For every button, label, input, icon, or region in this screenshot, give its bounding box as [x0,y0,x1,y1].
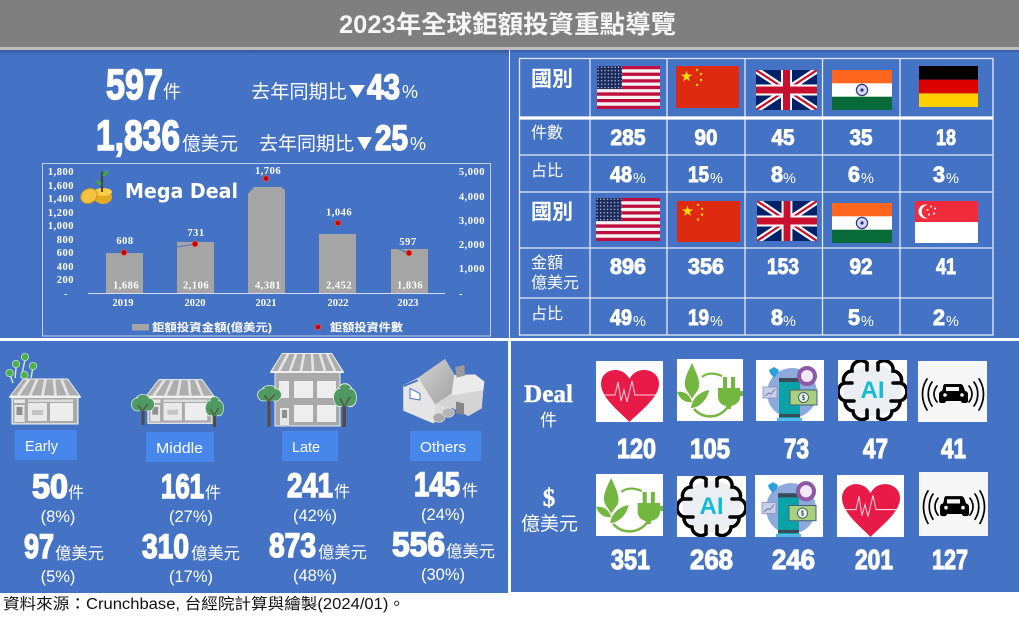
row: amount [531,254,956,292]
middle stage figures: 件 [205,484,221,502]
row label: amount: $ [543,485,555,512]
middle stage figures: (27%) [169,508,213,526]
row: deal share: % [710,171,723,187]
row: amount share: 19 [688,305,709,330]
bar value labels: 2,106 [183,280,209,292]
right axis labels: 5,000 [459,167,485,178]
row: amount: 金額 [531,254,563,272]
stage label: Others: Others [420,439,466,456]
bars: investment amount [106,187,428,293]
row: deal count: 285 [610,125,646,150]
count labels [116,166,417,248]
count labels: 1,046 [326,208,352,218]
row: amount: 153 [767,254,799,279]
row: deal share: 6 [848,162,860,187]
right axis labels: 4,000 [459,192,485,203]
investment amount year-over-year change [259,119,426,158]
right axis labels: 1,000 [459,264,485,275]
year labels: 2020 [184,298,206,309]
row: amount share: 占比 [531,305,563,323]
bar value labels: 4,381 [255,280,281,292]
late stage figures [269,467,367,585]
count labels: 731 [187,228,205,239]
late stage figures: (48%) [293,567,337,585]
chart legend: 鉅額投資金額(億美元) [152,320,272,334]
chart: mega deal amount and count 2019-2023 [42,164,490,336]
row: deal count: 45 [772,125,794,150]
row label: amount: 億美元 [521,513,578,535]
sector icons by deal count: AI [860,377,884,404]
sector icons by deal count [596,359,987,422]
row: amount share [531,305,959,330]
sector deal counts [617,433,966,464]
investment amount year-over-year change: 25 [375,119,408,158]
stage label: Early: Early [25,438,58,455]
left axis labels: - [64,289,68,300]
sector deal counts: 120 [617,433,656,464]
year labels: 2019 [112,298,134,309]
late stage figures: 億美元 [318,543,367,562]
row: amount: 41 [936,254,956,279]
icon: early stage shop with sprouts [6,353,81,424]
line slivers across bars [177,244,409,253]
others figures: 556 [392,526,445,564]
row: deal share: 3 [933,162,945,187]
row: amount share: % [946,314,959,330]
icon: others house [403,359,484,423]
panel: top sectors [511,341,1019,592]
bar value labels: 1,686 [113,280,139,292]
late stage figures: 件 [334,483,350,501]
year labels: 2023 [398,298,418,309]
row: amount share: % [710,314,723,330]
row: deal share: % [783,171,796,187]
title banner: 2023年全球鉅額投資重點導覽 [339,10,676,39]
flags: top countries by deal count [597,66,978,110]
row: deal share: 8 [771,162,783,187]
row: amount: 億美元 [531,274,579,292]
deal count year-over-year change: 去年同期比 [251,81,347,103]
icon: middle stage shop with trees [132,379,224,427]
others figures: (30%) [421,566,465,584]
right axis labels: 2,000 [459,240,485,251]
right axis labels: - [459,289,463,300]
row: deal share: % [633,171,646,187]
row: deal count: 件數 [531,124,563,142]
row: amount share: 5 [848,305,860,330]
row: deal share: 48 [610,162,632,187]
left axis labels: 800 [57,235,74,246]
year labels: 2022 [328,298,348,309]
row heading: country: 國別 [531,68,573,91]
icon: coins with sprout [78,171,112,206]
sector deal counts: 41 [941,433,966,464]
others figures: (24%) [421,506,465,524]
deal count headline: 597 [106,61,163,109]
stage label: Early [15,430,77,460]
sector amounts: 127 [932,544,968,575]
right axis labels: 3,000 [459,216,485,227]
sector amounts: 268 [690,544,733,575]
flags: top countries by amount [596,198,978,243]
others figures: 145 [414,466,460,504]
bar value labels: 1,836 [397,280,423,292]
early stage figures: 件 [68,484,84,502]
table grid [520,58,993,335]
count markers [121,176,412,256]
row: amount share: % [861,314,874,330]
row: deal count: 18 [936,125,956,150]
row: amount: 356 [688,254,724,279]
late stage figures: (42%) [293,507,337,525]
row: amount share: % [633,314,646,330]
deal count year-over-year change [251,68,418,107]
year labels: 2021 [256,298,276,309]
panel: investment stages [0,341,508,593]
chart title: Mega Deal: Mega Deal [125,179,238,203]
others figures: 件 [462,482,478,500]
row label: deal count: 件 [540,411,557,430]
sector icons by amount: AI [700,493,724,520]
row: amount share: % [783,314,796,330]
row: amount share: 8 [771,305,783,330]
left axis labels: 400 [57,262,74,273]
row: amount: 92 [850,254,872,279]
bar value labels: 2,452 [326,280,352,292]
others figures [392,466,495,584]
early stage figures [24,468,104,586]
sector amounts [611,544,968,575]
stage label: Late: Late [292,439,320,456]
row: deal count [531,124,956,150]
count labels: 597 [399,237,417,248]
stage label: Middle: Middle [156,440,203,457]
row: amount share: 2 [933,305,945,330]
investment amount headline: 億美元 [182,133,238,155]
chart legend [132,320,403,334]
row label: deal count [524,381,573,430]
sector icons by amount [596,472,988,537]
investment amount headline: 1,836 [96,112,180,160]
left axis labels: 200 [57,275,74,286]
panel: annual summary and mega deal chart [0,50,509,338]
chart legend: 鉅額投資件數 [330,320,403,334]
left axis labels: 1,200 [48,208,74,219]
year labels [112,298,418,309]
others figures: 億美元 [446,542,495,561]
left axis labels: 600 [57,248,74,259]
middle stage figures: 億美元 [191,544,240,563]
row: amount: 896 [610,254,646,279]
sector amounts: 246 [772,544,815,575]
sector amounts: 201 [855,544,893,575]
early stage figures: (5%) [41,568,75,586]
stage label: Late [282,431,338,461]
title banner [0,0,1019,50]
late stage figures: 873 [269,527,316,565]
row: deal count: 35 [850,125,872,150]
left axis labels: 1,800 [48,167,74,178]
panel: top countries table [510,50,1019,338]
middle stage figures: 310 [142,528,189,566]
bar value labels [113,280,423,292]
row: amount share: 49 [610,305,632,330]
source note: 資料來源：Crunchbase, 台經院計算與繪製(2024/01)。 [3,594,405,613]
deal count year-over-year change: % [402,82,418,102]
row label: deal count: Deal [524,381,573,408]
row: deal share [531,162,959,187]
right axis labels [459,167,485,300]
row: deal count: 90 [694,125,718,150]
left axis labels: 1,000 [48,221,74,232]
deal count year-over-year change: 43 [367,68,400,107]
investment amount year-over-year change: 去年同期比 [259,133,354,155]
early stage figures: 97 [24,528,54,566]
middle stage figures: (17%) [169,568,213,586]
left axis labels: 1,600 [48,181,74,192]
early stage figures: (8%) [41,508,75,526]
row heading: country (amount): 國別 [531,201,573,224]
deal count headline: 件 [163,82,181,102]
early stage figures: 50 [32,468,68,506]
stage label: Middle [146,432,214,462]
left axis labels [48,167,74,300]
investment amount year-over-year change: % [410,134,426,154]
middle stage figures [142,468,240,586]
sector deal counts: 73 [784,433,809,464]
middle stage figures: 161 [161,468,204,506]
row label: amount [521,485,578,535]
early stage figures: 億美元 [55,544,104,563]
sector deal counts: 105 [690,433,730,464]
count labels: 608 [116,236,134,247]
left axis labels: 1,400 [48,194,74,205]
row: deal share: % [861,171,874,187]
late stage figures: 241 [287,467,333,505]
sector deal counts: 47 [863,433,888,464]
count labels: 1,706 [255,166,281,177]
icon: late stage two-storey building with trees [258,353,356,427]
row: deal share: 占比 [531,162,563,180]
row: deal share: 15 [688,162,709,187]
row: deal share: % [946,171,959,187]
sector amounts: 351 [611,544,650,575]
stage label: Others [410,431,481,461]
